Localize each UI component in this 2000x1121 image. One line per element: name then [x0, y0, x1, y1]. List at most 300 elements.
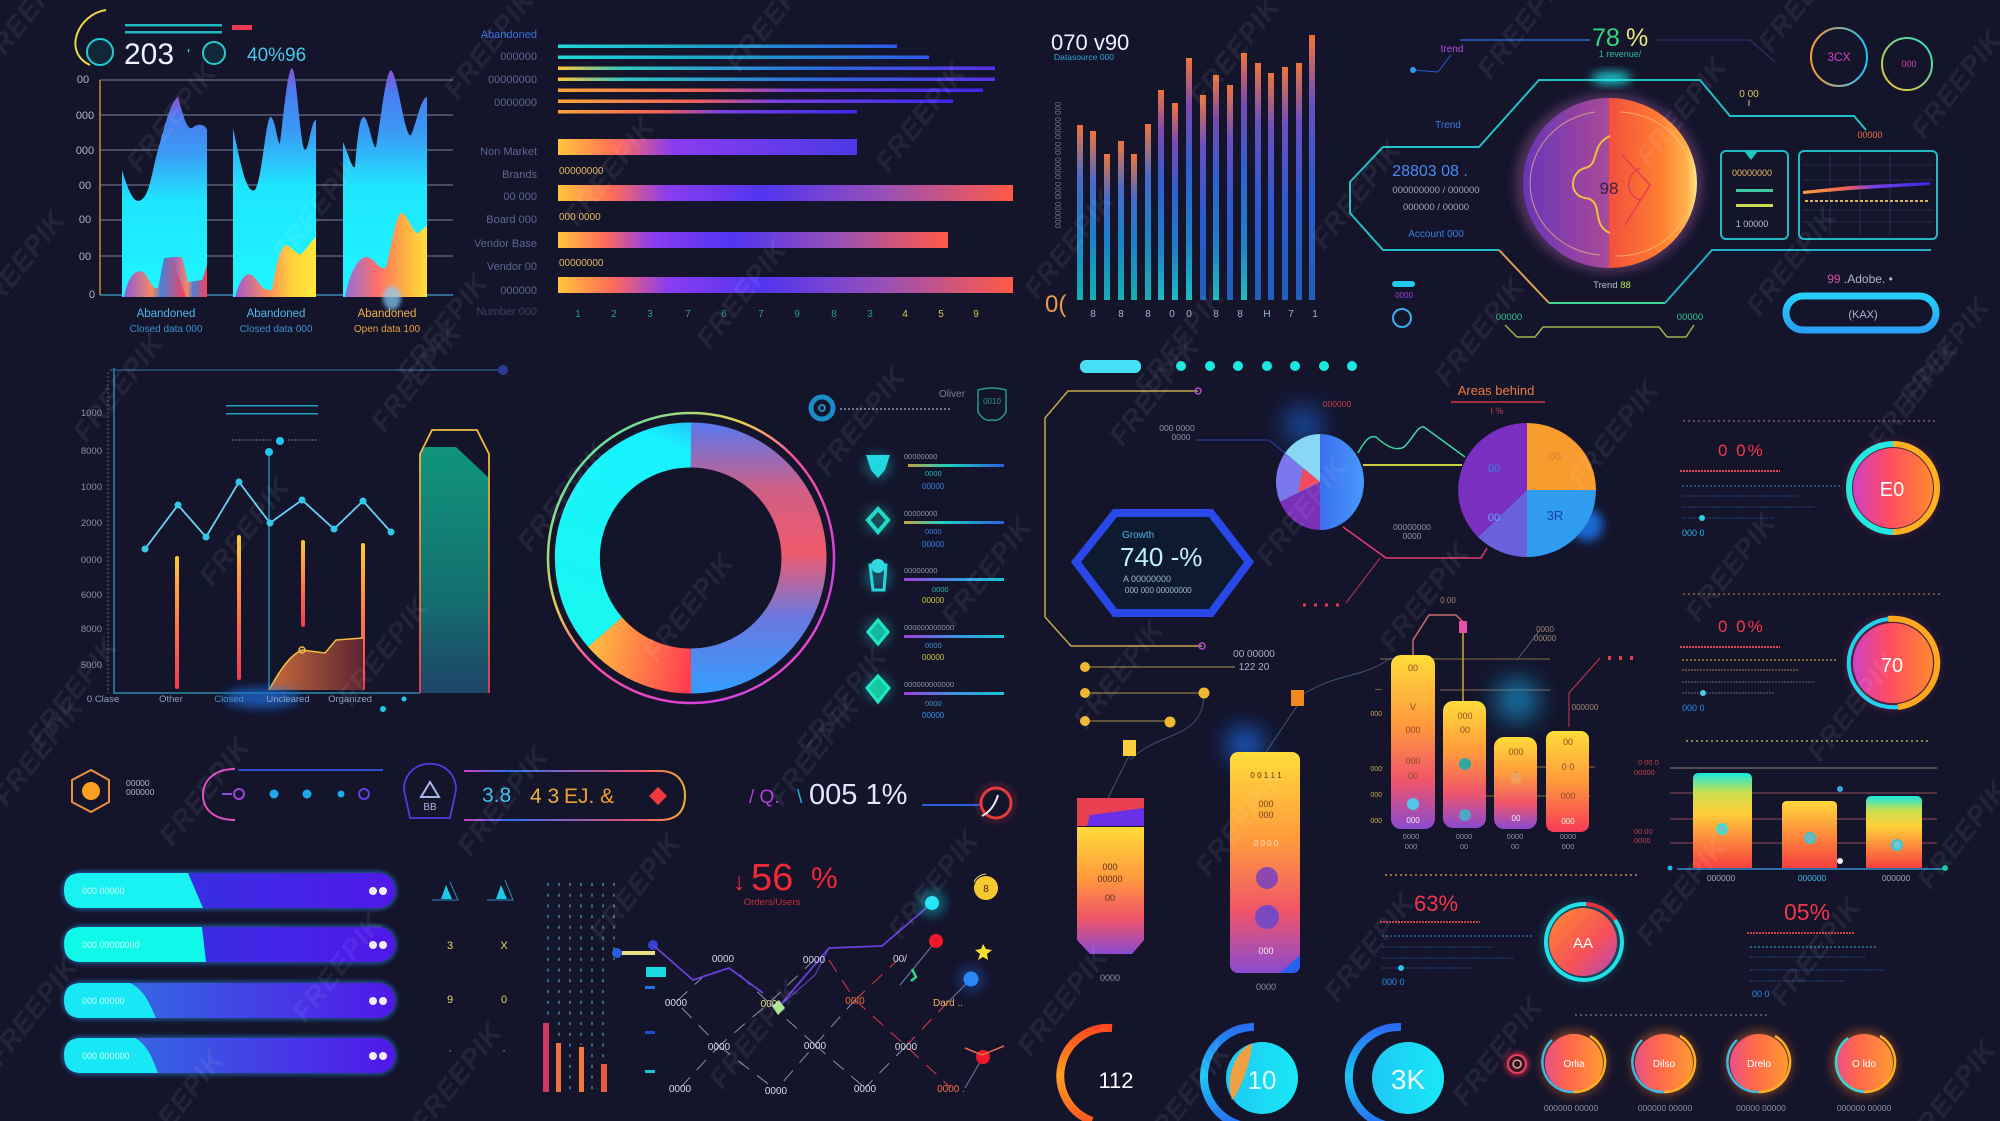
house badge	[404, 764, 456, 818]
columns	[1391, 655, 1589, 832]
tall bar: 000	[1258, 799, 1274, 809]
watermarks: FREEPIK	[935, 510, 1039, 631]
percent strip	[749, 779, 907, 811]
vertical axis caption: 000 00000 000 00000 0000 000000	[1053, 102, 1062, 229]
stat text: 000 0	[1682, 703, 1705, 713]
network nodes	[772, 874, 1004, 1064]
column axis labels: 8	[1090, 309, 1096, 320]
left tags: 0 00 0	[1638, 758, 1659, 767]
column details: 00	[1512, 814, 1521, 823]
column details: 000	[1561, 817, 1575, 826]
percent: 05%	[1784, 899, 1830, 925]
stat text: 000 0	[1682, 528, 1705, 538]
column axis labels: 0	[1169, 309, 1175, 320]
panel: status strip	[72, 764, 1015, 822]
series labels: Abandoned	[137, 308, 195, 320]
watermarks: FREEPIK	[365, 316, 469, 437]
bar axis numbers: 1	[575, 309, 581, 320]
x labels: 0 Clase	[87, 694, 119, 705]
watermarks: FREEPIK	[451, 740, 555, 861]
pill 1: 000 00000	[82, 886, 125, 896]
baseline	[1668, 865, 1948, 871]
watermarks: FREEPIK	[120, 56, 224, 177]
series labels	[130, 308, 421, 335]
y axis labels: 00	[79, 214, 91, 226]
bottom bracket	[1505, 325, 1694, 337]
network labels: 00/	[893, 954, 907, 965]
column axis labels: 8	[1237, 309, 1243, 320]
orb	[1543, 902, 1623, 982]
pill 2	[62, 925, 397, 964]
column captions: 0000	[1456, 832, 1472, 841]
network labels: 0000	[665, 998, 688, 1009]
left data text: 000000000 / 000000	[1392, 185, 1480, 196]
stat text: 0 0%	[1718, 617, 1765, 636]
watermarks: FREEPIK	[1679, 506, 1783, 627]
series labels: Closed data 000	[240, 324, 313, 335]
panel: pill markers	[432, 880, 513, 1058]
network labels: 0000	[854, 1084, 877, 1095]
glyph markers: X	[500, 940, 508, 952]
tall shape	[420, 430, 489, 693]
percent strip: 005 1%	[809, 779, 907, 811]
area shape 2	[233, 68, 316, 297]
left tags: 0000	[1634, 836, 1651, 845]
row 3: 0000	[932, 585, 949, 594]
gauge heading: 40%96	[247, 45, 306, 66]
panel: right stat one	[1680, 421, 1938, 538]
donut outer ring	[548, 413, 834, 703]
small panel	[1721, 151, 1788, 239]
network nodes: 8	[983, 884, 989, 895]
tall bar: 0 0 1 1 1	[1250, 771, 1282, 780]
shield: 0010	[983, 397, 1001, 406]
callout line	[1413, 55, 1451, 72]
small pie	[1276, 434, 1364, 530]
row labels: Non Market	[480, 146, 537, 158]
y labels: 1000	[81, 482, 102, 493]
gauge heading: '	[187, 47, 190, 64]
connector dots	[1080, 662, 1210, 728]
y labels: 6000	[81, 590, 102, 601]
legend heading: Oliver	[939, 389, 966, 400]
watermarks: FREEPIK	[763, 690, 867, 811]
percent heading: %	[811, 862, 838, 895]
connector caption: 122 20	[1239, 662, 1270, 673]
stat text: 63%	[1414, 891, 1458, 916]
vertical bars	[175, 535, 365, 690]
watermarks: FREEPIK	[1103, 330, 1207, 451]
chart grid and axes	[100, 80, 453, 295]
row 1: 00000	[922, 482, 945, 491]
panel: line chart	[81, 365, 508, 712]
mini orb 4	[1831, 1030, 1897, 1096]
column details: 00	[1408, 663, 1418, 673]
network labels: 0000	[712, 954, 735, 965]
watermarks: FREEPIK	[1630, 50, 1734, 171]
panel: dot connectors	[1080, 649, 1275, 760]
large pie: 00	[1488, 512, 1500, 524]
watermarks: FREEPIK	[1305, 133, 1409, 254]
dotted leader	[840, 408, 950, 410]
panel: stat 63 percent	[1380, 875, 1637, 987]
watermarks: FREEPIK	[1893, 290, 1997, 411]
y labels: 2000	[81, 518, 102, 529]
stat text	[1380, 891, 1532, 987]
column details: 00	[1408, 771, 1418, 781]
series labels: Open data 100	[354, 324, 421, 335]
base glow	[224, 688, 300, 708]
tall bar: 0 0 0 0	[1254, 839, 1279, 848]
central orb	[1515, 93, 1703, 273]
area shape 1	[122, 97, 207, 297]
tall bar caption: 0000	[1256, 982, 1276, 992]
dial 3K: 3K	[1391, 1064, 1425, 1095]
row 3: 00000000	[904, 566, 937, 575]
hex stat: Growth	[1122, 530, 1154, 541]
callout labels: 000000	[1572, 703, 1599, 712]
left ticks: 000	[1370, 792, 1382, 799]
segment: cyan	[577, 445, 691, 632]
orange square	[1291, 690, 1304, 706]
row labels: Vendor 00	[487, 261, 537, 273]
mini orb 2	[1631, 1030, 1697, 1096]
panel: gradient columns	[1634, 741, 1948, 883]
stat text: 0 0%	[1718, 441, 1765, 460]
pill button	[1786, 272, 1936, 330]
bar axis numbers: 9	[973, 309, 979, 320]
y labels: 8000	[81, 624, 102, 635]
network labels: 00/0	[845, 996, 865, 1007]
column captions	[1707, 873, 1910, 883]
column markers	[1717, 786, 1902, 864]
bar axis numbers: 9	[794, 309, 800, 320]
glyph markers: 0	[501, 994, 507, 1006]
column details: 000	[1457, 711, 1473, 721]
column details	[1405, 663, 1576, 826]
dial 10: 10	[1248, 1065, 1276, 1095]
column axis labels: 8	[1145, 309, 1151, 320]
stat text	[1680, 617, 1838, 713]
connector caption: 00 00000	[1233, 649, 1275, 660]
column captions	[1403, 832, 1576, 851]
orb	[1848, 443, 1938, 533]
row 2	[864, 506, 1004, 549]
watermarks: FREEPIK	[21, 630, 125, 751]
row labels: Board 000	[486, 214, 537, 226]
capsule caption: 0000	[1100, 973, 1120, 983]
bottom tags: Trend 88	[1593, 280, 1631, 291]
callout labels: 0000	[1536, 625, 1554, 634]
top right tag: 00000	[1857, 130, 1883, 140]
left data text: Account 000	[1408, 229, 1464, 240]
watermarks: FREEPIK	[1562, 373, 1666, 494]
columns	[1693, 773, 1922, 868]
column details: 0	[1513, 770, 1519, 780]
watermarks: FREEPIK	[511, 436, 615, 557]
thick bars	[558, 139, 1013, 293]
panel: bottom dials	[1060, 1015, 1897, 1121]
percent heading	[733, 857, 838, 908]
red dial	[922, 784, 1015, 822]
panel: donut legend	[811, 388, 1006, 720]
row labels: Brands	[502, 169, 537, 181]
column details: V	[1410, 702, 1416, 712]
row labels: Abandoned	[481, 29, 537, 41]
network labels: 0000 .	[937, 1084, 965, 1095]
percent strip: \	[797, 787, 803, 808]
row 5: 0000	[925, 699, 942, 708]
mini orb 1	[1541, 1030, 1607, 1096]
pill button: (KAX)	[1848, 309, 1878, 321]
y axis labels: 000	[76, 110, 94, 122]
pie glow	[1283, 405, 1323, 445]
row 4: 000000000000	[904, 623, 954, 632]
column captions: 000	[1562, 842, 1574, 851]
left data text: Trend	[1435, 120, 1461, 131]
network labels: 0000	[765, 1086, 788, 1097]
row labels: 0000000	[494, 97, 537, 109]
column captions: 00	[1460, 842, 1468, 851]
x labels: Organized	[328, 694, 372, 705]
bottom tags: 00000	[1677, 312, 1703, 323]
row 1	[864, 452, 1004, 491]
row labels: 000000	[500, 285, 537, 297]
watermarks: FREEPIK	[1801, 646, 1905, 767]
right pill	[464, 771, 685, 820]
watermarks: FREEPIK	[1373, 536, 1477, 657]
x dots	[380, 696, 406, 712]
top right tag	[1739, 89, 1883, 140]
dial 112: 112	[1098, 1068, 1134, 1093]
tall bar: 000	[1258, 946, 1274, 956]
grid lines	[1380, 659, 1595, 796]
dial 112	[1060, 1028, 1134, 1121]
shield	[978, 388, 1006, 420]
diamond mesh	[676, 941, 983, 1090]
watermarks: FREEPIK	[558, 110, 662, 231]
left data text: 28803 08 .	[1392, 163, 1468, 180]
y axis labels: 000	[76, 145, 94, 157]
right pill: 3.8	[482, 784, 511, 807]
column axis labels	[1090, 309, 1318, 320]
dotted rule	[1683, 593, 1941, 595]
connector tracks	[1085, 667, 1235, 721]
x labels: Other	[159, 694, 183, 705]
callout labels: 00000	[1534, 634, 1557, 643]
percent heading: Orders/Users	[744, 897, 800, 908]
column captions: 0000	[1560, 832, 1576, 841]
orb	[1848, 618, 1938, 708]
orb captions: 000000 00000	[1544, 1103, 1598, 1113]
hex stat: A 00000000	[1123, 574, 1171, 584]
top right rings	[1811, 28, 1932, 90]
y axis labels: 0	[89, 289, 95, 301]
pie captions	[1159, 423, 1431, 541]
column axis labels: 8	[1213, 309, 1219, 320]
dial 10	[1204, 1027, 1298, 1121]
left ticks: 000	[1370, 711, 1382, 718]
area shape 3	[343, 70, 427, 297]
row labels: 00 000	[503, 191, 537, 203]
row 3: 00000	[922, 596, 945, 605]
pill button: 99 .Adobe. •	[1827, 272, 1893, 286]
glow under third area	[383, 286, 401, 310]
watermarks: FREEPIK	[1189, 760, 1293, 881]
watermarks: FREEPIK	[1067, 613, 1171, 734]
panel: dot matrix bars	[543, 883, 614, 1092]
watermarks: FREEPIK	[1318, 886, 1422, 1007]
yellow square	[1123, 740, 1136, 756]
network labels: 0000	[804, 1041, 827, 1052]
network labels	[665, 954, 965, 1097]
panel: horizontal bars	[474, 29, 1013, 320]
orb captions	[1544, 1103, 1891, 1113]
row 3	[864, 559, 1004, 605]
bar axis numbers	[575, 309, 979, 320]
top glow	[1591, 72, 1631, 84]
capsule bar: 00000	[1097, 874, 1123, 884]
pill 4: 000 000000	[82, 1051, 130, 1061]
pill 3: 000 00000	[82, 996, 125, 1006]
row 2: 00000000	[904, 509, 937, 518]
column axis labels: H	[1263, 309, 1271, 320]
x labels: Closed	[214, 694, 244, 705]
series labels: Abandoned	[247, 308, 305, 320]
watermarks: FREEPIK	[637, 546, 741, 667]
thin bars	[558, 44, 995, 114]
dotted rule	[1385, 874, 1637, 876]
column details: 000	[1560, 791, 1576, 801]
watermarks: FREEPIK	[1018, 183, 1122, 304]
bar axis numbers: 3	[867, 309, 873, 320]
connector lines	[1108, 658, 1391, 798]
orb captions: 00000 00000	[1736, 1103, 1786, 1113]
capsule bar: 000	[1102, 862, 1118, 872]
column details: 00	[1563, 737, 1573, 747]
dial 3K	[1349, 1027, 1444, 1121]
glyph markers: '	[503, 1049, 505, 1058]
left tags	[1634, 758, 1659, 845]
panel: stat 05 percent	[1747, 899, 1885, 999]
left markers	[612, 940, 666, 1073]
column details: 0 0	[1562, 762, 1574, 772]
glyph markers: '	[449, 1049, 451, 1058]
network labels: 0000	[669, 1084, 692, 1095]
y labels: 5000	[81, 660, 102, 671]
pie captions: 000 0000	[1159, 423, 1195, 433]
hex stat: 740 -%	[1120, 542, 1202, 572]
bottom tags: 00000	[1496, 312, 1522, 323]
row 2: 00000	[922, 540, 945, 549]
dotted rule	[1686, 740, 1930, 742]
column details: 000	[1405, 725, 1421, 735]
percent heading: 1 revenue/	[1599, 49, 1642, 59]
bar axis numbers: 3	[647, 309, 653, 320]
watermarks: FREEPIK	[1630, 830, 1734, 951]
purple path	[653, 903, 932, 1010]
y axis labels: 00	[79, 180, 91, 192]
panel: right stat two	[1680, 594, 1941, 713]
network labels: Dard ..	[933, 998, 963, 1009]
left ticks: —	[1375, 686, 1382, 693]
pie heading: I %	[1490, 406, 1504, 416]
percent heading: ↓	[733, 868, 746, 896]
axes	[108, 365, 508, 693]
dotted rule	[1683, 420, 1937, 422]
column details: 000	[1508, 747, 1524, 757]
dot grid	[548, 883, 614, 1090]
target icon	[811, 397, 833, 419]
bar axis numbers: 5	[938, 309, 944, 320]
left tags: 00 00	[1634, 827, 1653, 836]
watermarks: FREEPIK	[153, 730, 257, 851]
column axis labels: 7	[1288, 309, 1294, 320]
column captions: 000000	[1707, 873, 1735, 883]
pie captions: 0000	[1172, 432, 1191, 442]
connector curve	[1130, 693, 1204, 760]
hex frame	[1350, 80, 1931, 303]
bar axis numbers: 4	[902, 309, 908, 320]
column details: 000	[1405, 756, 1421, 766]
left ticks: 000	[1370, 766, 1382, 773]
hex stat	[1076, 513, 1249, 613]
panel: orange tall bars	[1077, 658, 1391, 992]
line series	[142, 478, 394, 552]
column axis zero: 0(	[1045, 291, 1066, 318]
percent heading: 78	[1592, 24, 1620, 52]
mini orb 2: Dilso	[1653, 1059, 1676, 1070]
y axis labels: 00	[79, 251, 91, 263]
small panel: 1 00000	[1736, 219, 1768, 229]
connector caption	[1233, 649, 1275, 673]
bar captions: 000 0000	[559, 212, 601, 223]
watermarks: FREEPIK	[869, 56, 973, 177]
pill 2: 000 00000000	[82, 940, 140, 950]
row 4	[864, 618, 1004, 662]
network labels: 000	[761, 999, 778, 1010]
tall bar	[1230, 752, 1300, 973]
x labels	[87, 694, 372, 705]
watermarks: FREEPIK	[391, 266, 495, 387]
series labels: Closed data 000	[130, 324, 203, 335]
column captions: 0000	[1507, 832, 1523, 841]
row 4: 0000	[925, 641, 942, 650]
glyph markers: 3	[447, 940, 453, 952]
row 5	[864, 674, 1004, 720]
column heading: 070 v90	[1051, 30, 1129, 55]
row 2: 0000	[925, 527, 942, 536]
top right rings: 3CX	[1827, 50, 1851, 64]
callout wires	[1413, 615, 1600, 727]
watermarks: FREEPIK	[67, 326, 171, 447]
bottom tags	[1496, 280, 1703, 323]
row labels: 000000	[500, 51, 537, 63]
pie heading	[1323, 383, 1545, 416]
left data text: trend	[1441, 44, 1463, 55]
tall bar: 000	[1258, 810, 1274, 820]
watermarks: FREEPIK	[1250, 450, 1354, 571]
pink tab	[1459, 621, 1467, 633]
watermarks: FREEPIK	[703, 973, 807, 1094]
column captions: 0000	[1403, 832, 1419, 841]
glyph markers: 9	[447, 994, 453, 1006]
column captions: 00	[1511, 842, 1519, 851]
pill 1	[62, 871, 397, 910]
column captions: 000	[1405, 842, 1417, 851]
grid lines	[1670, 768, 1937, 843]
watermarks: FREEPIK	[1128, 280, 1232, 401]
